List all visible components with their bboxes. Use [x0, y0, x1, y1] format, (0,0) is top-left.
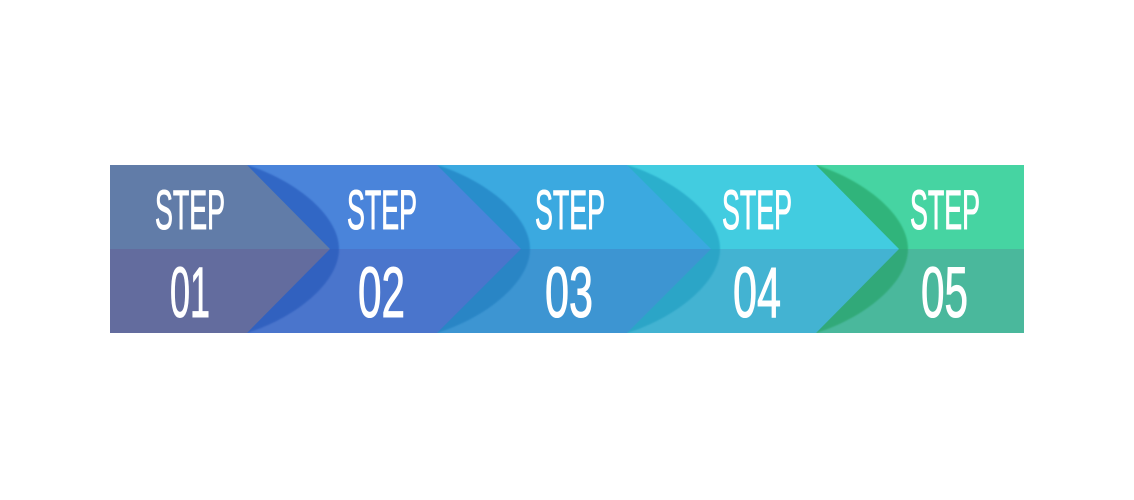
step 4 segment: STEP: [722, 178, 792, 241]
process chevron infographic: [110, 165, 1024, 333]
step 2 segment: [240, 165, 521, 333]
step 3 number: 03: [545, 254, 593, 333]
step 5 segment: [810, 165, 1024, 333]
step 2 segment: STEP: [347, 178, 417, 241]
step 1 segment: STEP: [155, 178, 225, 241]
step 3 segment: [430, 165, 711, 333]
step 5 segment: STEP: [910, 178, 980, 241]
step 3 segment: STEP: [535, 178, 605, 241]
step 5 number: 05: [921, 254, 968, 333]
step 4 number: 04: [733, 254, 781, 333]
step 1 segment: [110, 165, 330, 333]
step 2 number: 02: [358, 254, 405, 333]
step 4 segment: [620, 165, 899, 333]
step 1 number: 01: [170, 254, 210, 333]
